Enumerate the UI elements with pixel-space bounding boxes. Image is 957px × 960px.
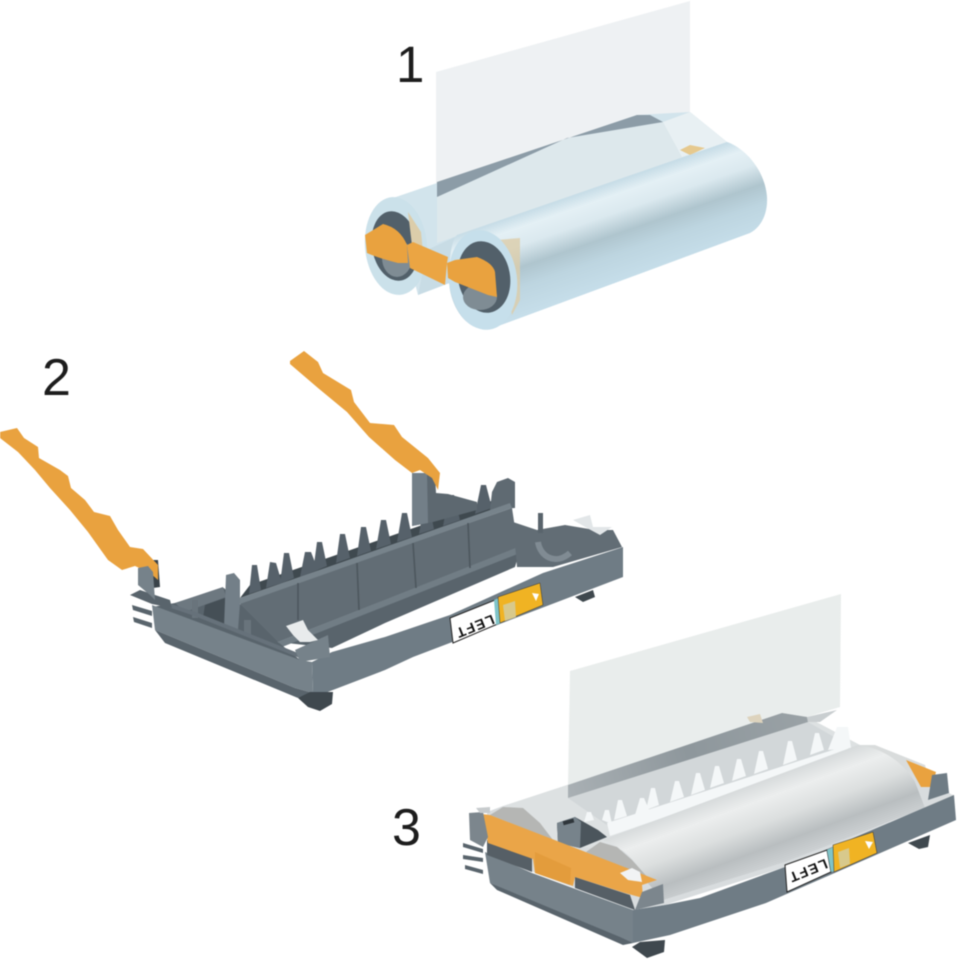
step 1: film roll cartridge — [361, 1, 767, 334]
arm hinge dark — [153, 560, 160, 588]
left fins — [463, 843, 483, 874]
rear left rail — [175, 587, 226, 612]
front roller end — [586, 842, 650, 880]
film sheet — [436, 1, 690, 197]
front roller — [443, 142, 767, 334]
left white clip — [286, 620, 318, 642]
number 3: 3 — [392, 799, 421, 857]
left lower facet — [155, 630, 313, 698]
orange end bracket — [365, 224, 497, 297]
left lower facet — [490, 883, 633, 945]
dark inner clips — [487, 840, 635, 910]
step 3: loaded cartridge — [463, 594, 956, 958]
number 1: 1 — [396, 36, 424, 93]
base under rollers — [487, 775, 952, 910]
right end post — [490, 478, 515, 510]
foot left — [632, 940, 665, 958]
center post — [557, 817, 607, 848]
small post on end wall — [538, 513, 543, 533]
right white clip — [573, 515, 612, 535]
right post — [928, 773, 949, 800]
teeth — [249, 485, 492, 594]
cradle — [538, 542, 570, 559]
left post — [224, 573, 240, 630]
label — [450, 583, 543, 643]
orange arm left — [0, 428, 158, 580]
step 2: empty cartridge tray — [0, 351, 623, 711]
right orange piece — [906, 760, 936, 787]
small inner posts — [192, 600, 251, 636]
label — [785, 832, 877, 892]
left front wall — [152, 605, 313, 693]
label: LEFT — [786, 856, 830, 886]
corner post — [635, 884, 664, 910]
right end wall — [513, 522, 622, 567]
panel lower rib — [278, 547, 520, 647]
white rail and teeth — [584, 727, 851, 836]
right foot — [575, 590, 595, 602]
number 2: 2 — [42, 349, 71, 407]
top left clip — [476, 807, 490, 813]
bridge — [407, 242, 448, 285]
panel top rib — [240, 503, 512, 604]
right cap — [447, 257, 497, 297]
panel seams — [298, 523, 470, 620]
foot right — [908, 835, 930, 849]
foot — [298, 692, 333, 711]
orange arm right — [290, 351, 440, 490]
left wall — [485, 852, 633, 943]
floor below panel — [278, 550, 520, 648]
front wall — [633, 795, 956, 943]
orange bracket — [482, 814, 657, 898]
left dark floor — [203, 598, 225, 627]
long front wall — [312, 547, 623, 693]
corner post — [295, 635, 330, 662]
left bracket plates — [130, 590, 172, 628]
rear tall post — [412, 473, 477, 526]
rear roller — [361, 112, 727, 298]
inner front rail — [153, 600, 300, 656]
left cap — [365, 224, 408, 263]
left interior floor — [152, 588, 305, 664]
front roller — [603, 745, 925, 900]
arm post left — [138, 566, 155, 600]
tray back right — [840, 745, 954, 810]
label: LEFT — [453, 612, 497, 642]
back panel — [240, 508, 518, 642]
film sheet — [568, 594, 841, 785]
left post — [469, 812, 488, 847]
white clip — [620, 868, 642, 882]
rear roller — [490, 710, 860, 850]
rear strip — [240, 498, 512, 598]
